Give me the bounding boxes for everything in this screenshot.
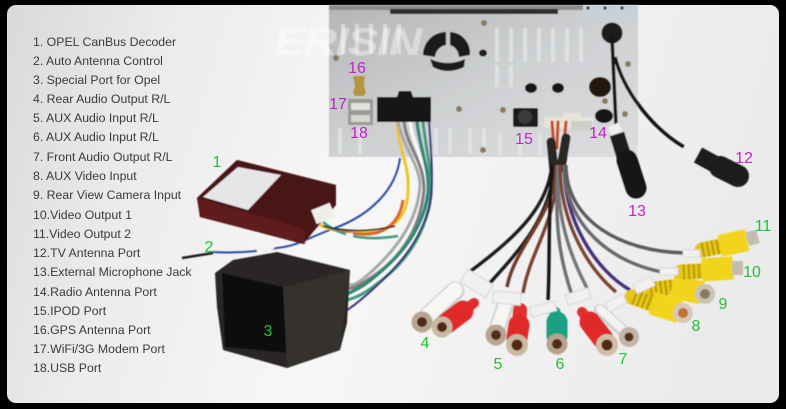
legend list: 16.GPS Antenna Port	[33, 323, 151, 337]
watermark: ERISIN	[274, 21, 423, 64]
photo: car stereo wiring	[182, 5, 760, 368]
green callout numbers: 3	[264, 323, 273, 340]
legend list: 18.USB Port	[33, 361, 102, 375]
jack: TV antenna	[615, 57, 738, 176]
magenta callout numbers: 16	[348, 60, 366, 77]
legend list: 11.Video Output 2	[33, 227, 131, 241]
cables: RCA fan	[468, 165, 686, 300]
legend list: 3. Special Port for Opel	[33, 73, 160, 87]
legend list: 8. AUX Video Input	[33, 169, 137, 183]
green callout numbers: 9	[719, 296, 728, 313]
module: CanBus decoder	[197, 160, 336, 244]
plug 7 red	[582, 312, 618, 356]
legend list: 1. OPEL CanBus Decoder	[33, 35, 176, 49]
magenta callout numbers: 18	[350, 125, 368, 142]
magenta callout numbers: 17	[329, 96, 347, 113]
tag 5	[492, 291, 522, 305]
port: white radio connector	[544, 113, 593, 128]
green callout numbers: 4	[421, 335, 430, 352]
port: GPS antenna	[353, 76, 366, 96]
legend list: 10.Video Output 1	[33, 208, 132, 222]
tag 7	[565, 288, 591, 305]
legend list: 14.Radio Antenna Port	[33, 285, 157, 299]
plug 8 yellow	[632, 297, 693, 323]
magenta callout numbers: 13	[628, 203, 646, 220]
plug 10 yellow	[681, 261, 743, 275]
port: main connector	[377, 91, 431, 122]
green callout numbers: 1	[213, 154, 222, 171]
tag 4	[460, 269, 493, 298]
cables: main harness	[182, 122, 432, 311]
panel: stereo rear plate	[329, 5, 638, 157]
RCA plugs	[412, 230, 760, 356]
green callout numbers: 10	[743, 264, 761, 281]
green callout numbers: 7	[619, 351, 628, 368]
legend list: 7. Front Audio Output R/L	[33, 150, 173, 164]
port: foam special connector	[215, 252, 350, 368]
plug 4 white	[412, 290, 455, 332]
legend list: 9. Rear View Camera Input	[33, 188, 182, 202]
plug tags	[605, 250, 700, 312]
legend list: 2. Auto Antenna Control	[33, 54, 163, 68]
plug 7 white	[600, 309, 639, 347]
green callout numbers: 5	[494, 356, 503, 373]
plug 4 red	[432, 303, 474, 338]
plug 11 yellow	[702, 230, 760, 250]
tag 6	[529, 301, 557, 317]
magenta callout numbers	[329, 60, 753, 220]
legend list: 15.IPOD Port	[33, 304, 107, 318]
green callout numbers	[205, 154, 771, 373]
legend list: 4. Rear Audio Output R/L	[33, 92, 171, 106]
legend list: 6. AUX Audio Input R/L	[33, 130, 159, 144]
plug 5 white	[486, 305, 506, 346]
green callout numbers: 8	[692, 318, 701, 335]
legend list: 5. AUX Audio Input R/L	[33, 111, 159, 125]
green callout numbers: 2	[205, 239, 214, 256]
legend list	[33, 35, 192, 375]
plug 5 red	[506, 310, 528, 356]
magenta callout numbers: 14	[589, 125, 607, 142]
cable: radio harness stub	[551, 122, 566, 170]
port: iPod	[513, 108, 538, 127]
legend list: 17.WiFi/3G Modem Port	[33, 342, 165, 356]
green callout numbers: 11	[755, 218, 771, 235]
label tags on cables	[253, 233, 353, 252]
port: USB	[348, 99, 373, 125]
magenta callout numbers: 12	[735, 150, 753, 167]
plug 9 yellow	[648, 284, 715, 304]
legend list: 12.TV Antenna Port	[33, 246, 141, 260]
magenta callout numbers: 15	[515, 131, 533, 148]
green callout numbers: 6	[556, 356, 565, 373]
legend list: 13.External Microphone Jack	[33, 265, 192, 279]
vent	[423, 32, 470, 71]
jack: microphone	[602, 22, 636, 188]
plug 6 teal	[546, 312, 568, 354]
